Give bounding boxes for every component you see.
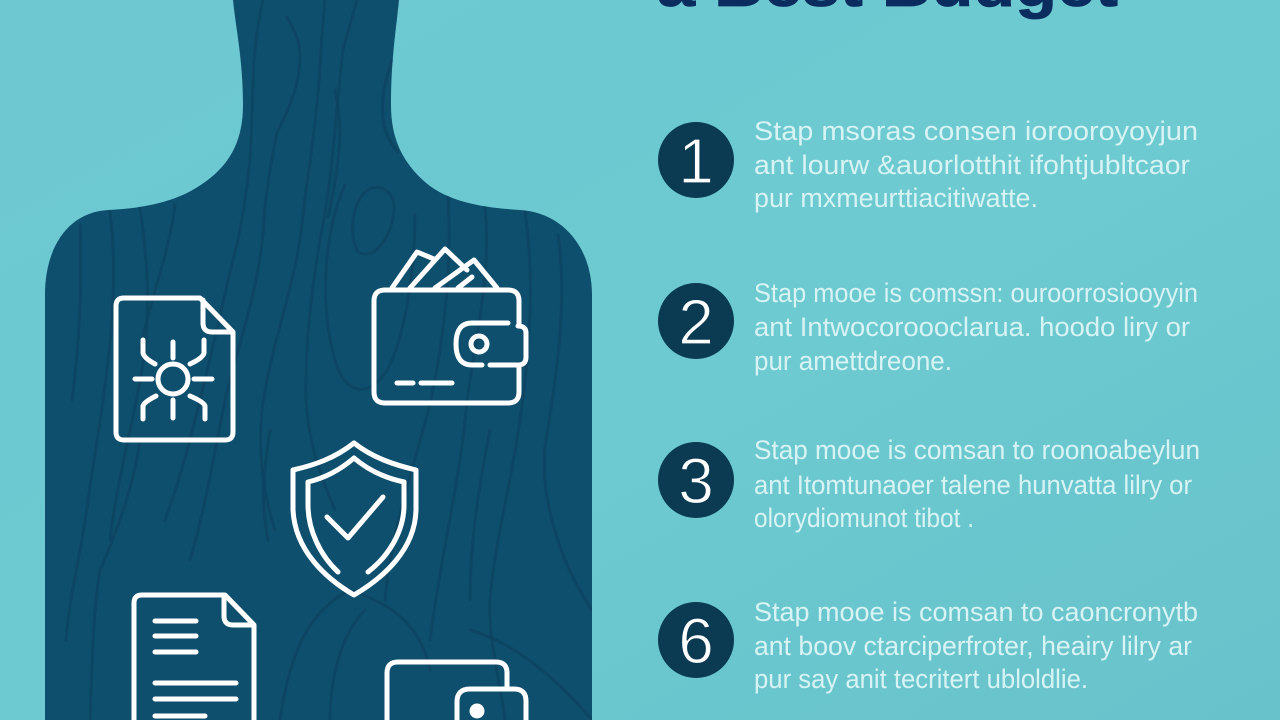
icon: wallet with cash bbox=[374, 249, 526, 403]
step 1 text: ant lourw &auorlotthit ifohtjubltcaor bbox=[754, 150, 1190, 180]
step 4 text: pur say anit tecritert ubloldlie. bbox=[754, 664, 1088, 694]
step 2 text: Stap mooe is comssn: ouroorrosiooyyin bbox=[754, 278, 1198, 308]
step 4 text: ant boov ctarciperfroter, heairy lilry ar bbox=[754, 631, 1192, 661]
step 1 bbox=[658, 116, 1198, 213]
step 4 bbox=[658, 597, 1198, 694]
number badge 1 bbox=[658, 122, 734, 198]
number badge 2: 2 bbox=[678, 286, 714, 358]
icon: document with lines bbox=[134, 595, 254, 720]
step 1 text: Stap msoras consen iorooroyoyjun bbox=[754, 116, 1198, 146]
step 3 text: ant Itomtunaoer talene hunvatta lilry or bbox=[754, 470, 1192, 500]
step 2 text: pur amettdreone. bbox=[754, 346, 952, 376]
step 2 text bbox=[754, 278, 1198, 376]
number badge 1: 1 bbox=[678, 125, 714, 197]
number badge 3: 3 bbox=[678, 445, 714, 517]
knot rings bbox=[353, 187, 394, 254]
step 1 text: pur mxmeurttiacitiwatte. bbox=[754, 183, 1038, 213]
icon: shield with check bbox=[293, 443, 416, 595]
icon: document with gear bbox=[116, 298, 233, 440]
step 4 text bbox=[754, 597, 1198, 694]
cutting board bbox=[45, 0, 592, 720]
wood grain bbox=[66, 0, 592, 720]
number badge 2 bbox=[658, 283, 734, 359]
board shape bbox=[45, 0, 592, 720]
number badge 3 bbox=[658, 442, 734, 518]
step 3 text: olorydiomunot tibot . bbox=[754, 503, 974, 533]
step 2 bbox=[658, 278, 1198, 376]
step 4 text: Stap mooe is comsan to caoncronytb bbox=[754, 597, 1198, 627]
step 3 text: Stap mooe is comsan to roonoabeylun bbox=[754, 435, 1200, 465]
number badge 6 bbox=[658, 602, 734, 678]
step 3 text bbox=[754, 435, 1200, 533]
step 1 text bbox=[754, 116, 1198, 213]
icon: wallet partial bbox=[387, 662, 526, 720]
step 3 bbox=[658, 435, 1200, 533]
step 2 text: ant Intwocoroooclarua. hoodo liry or bbox=[754, 312, 1190, 342]
number badge 6: 6 bbox=[678, 605, 714, 677]
